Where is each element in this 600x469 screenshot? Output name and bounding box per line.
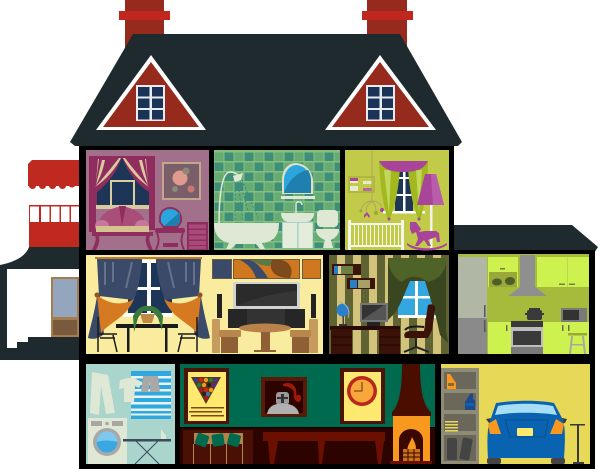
room: study <box>329 255 449 354</box>
round table <box>239 324 291 352</box>
billiards poster <box>184 368 229 424</box>
porch roof and walls <box>0 247 80 360</box>
globe <box>336 302 350 326</box>
fireplace <box>390 364 432 464</box>
pot <box>525 308 544 320</box>
fridge <box>458 257 487 354</box>
plant <box>133 306 163 332</box>
television <box>233 282 300 309</box>
shower <box>219 172 258 226</box>
chimney: right <box>362 0 413 50</box>
sink cabinet <box>281 202 314 248</box>
stove <box>511 321 543 354</box>
window <box>383 172 425 214</box>
armchair: left <box>212 319 241 353</box>
knight portrait <box>261 377 307 417</box>
room: nursery <box>345 150 449 251</box>
toilet <box>316 210 339 248</box>
curtains <box>379 161 428 220</box>
microwave <box>561 308 587 322</box>
clock poster <box>340 368 385 424</box>
room: game room <box>180 364 435 464</box>
car <box>486 401 567 464</box>
picture <box>162 162 201 200</box>
upper cabinets <box>488 257 589 287</box>
window <box>97 158 149 205</box>
room: living room <box>86 255 323 354</box>
curtains <box>89 156 122 192</box>
crib <box>348 220 404 250</box>
room: laundry <box>86 364 175 464</box>
room: kitchen <box>458 254 589 354</box>
dormer: right <box>325 55 436 130</box>
lower floors frame <box>79 250 595 469</box>
curtains <box>388 258 448 343</box>
door <box>51 277 79 337</box>
wallpaper stripes <box>337 255 441 354</box>
monitor <box>360 303 388 326</box>
speakers <box>217 294 316 318</box>
drawers <box>187 222 208 250</box>
balcony <box>29 205 79 248</box>
tire pump <box>570 424 585 464</box>
main roof <box>70 34 462 146</box>
bed <box>92 205 153 250</box>
mirror <box>281 163 315 199</box>
rocking horse <box>407 222 447 251</box>
chairs <box>98 317 197 352</box>
room: garage <box>441 364 590 464</box>
office chair <box>404 304 435 352</box>
dormer: left <box>96 55 206 130</box>
wall art <box>212 259 321 279</box>
window <box>123 260 172 317</box>
long table <box>263 432 385 464</box>
curtains <box>88 259 210 339</box>
shelf <box>348 176 375 193</box>
room: bedroom <box>86 150 209 250</box>
shelves <box>441 368 479 464</box>
chairs and counter <box>183 430 253 464</box>
ironing board <box>123 429 171 464</box>
side roof <box>453 225 598 253</box>
hanging clothes <box>90 372 160 415</box>
desk <box>330 326 400 354</box>
bathtub <box>214 223 279 249</box>
range hood <box>508 255 547 296</box>
table <box>116 324 178 352</box>
lower cabinets <box>488 322 589 354</box>
washing machine <box>88 418 127 464</box>
stool <box>568 333 587 354</box>
chair <box>155 207 185 250</box>
mobile <box>360 150 384 218</box>
window <box>398 281 436 318</box>
porch opening <box>7 269 80 348</box>
room: bathroom <box>214 150 340 250</box>
striped towel <box>131 371 171 419</box>
awning <box>28 160 79 189</box>
armchair: right <box>290 319 318 353</box>
bookshelves <box>332 264 375 289</box>
media cabinet <box>228 309 305 328</box>
chimney: left <box>119 0 170 50</box>
floor lamp <box>417 174 444 250</box>
house frame <box>79 146 454 253</box>
porch: left annex <box>0 160 80 360</box>
curtain backing <box>89 156 155 232</box>
curtain rod <box>95 257 202 259</box>
